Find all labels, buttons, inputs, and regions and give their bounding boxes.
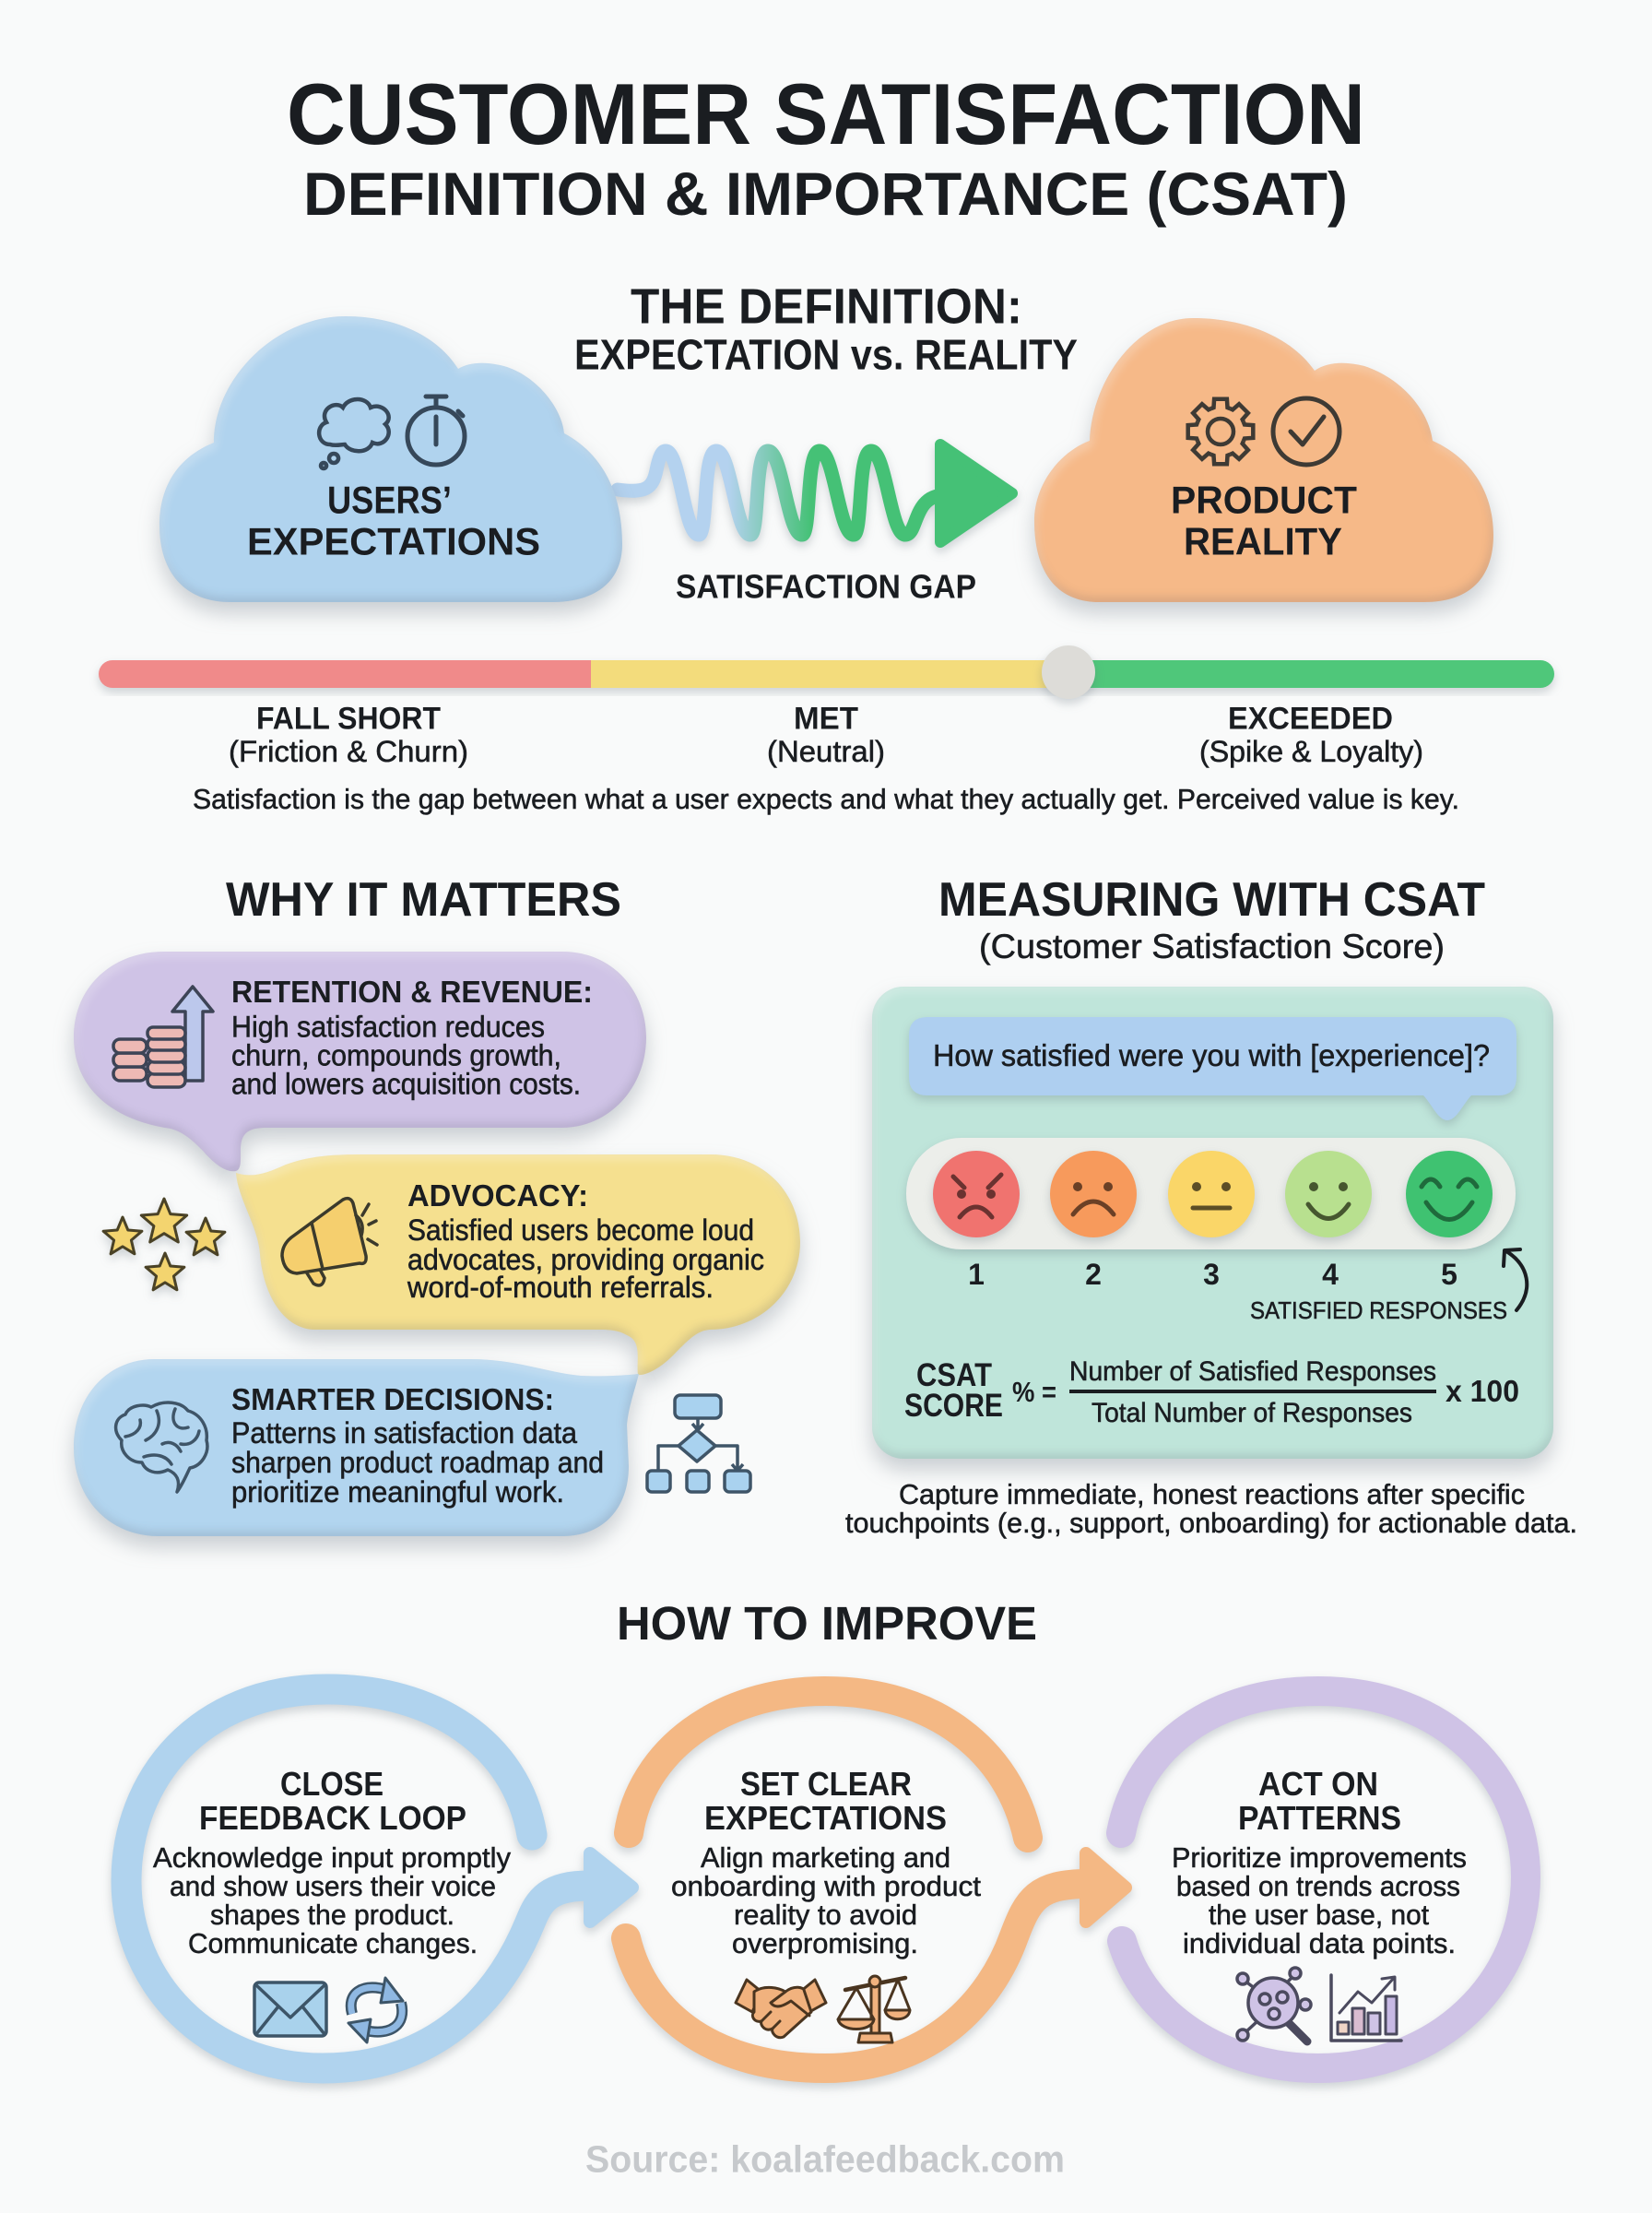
cloud: product reality xyxy=(1034,318,1493,602)
scale label: exceeded xyxy=(1199,701,1423,768)
face: unhappy xyxy=(1050,1151,1137,1237)
panel: csat survey xyxy=(872,987,1553,1459)
loop: close feedback loop: Communicate changes. xyxy=(188,1927,478,1959)
ring xyxy=(1121,1691,1526,2068)
slider scale xyxy=(99,645,1554,699)
scale label: exceeded: (Spike & Loyalty) xyxy=(1199,735,1423,768)
question bubble: How satisfied were you with [experience]? xyxy=(933,1038,1490,1072)
scale label: fall short: FALL SHORT xyxy=(256,701,441,736)
scale label: met xyxy=(767,701,885,768)
loop: close feedback loop: Acknowledge input promptly xyxy=(153,1841,511,1874)
title: DEFINITION & IMPORTANCE (CSAT) xyxy=(303,160,1348,228)
title xyxy=(287,65,1365,228)
question bubble xyxy=(909,1017,1516,1120)
definition description: Satisfaction is the gap between what a user expects and what they actually get. Perceived value is key. xyxy=(193,783,1459,815)
loop: set clear expectations: overpromising. xyxy=(732,1927,918,1959)
scale label: met: (Neutral) xyxy=(767,735,885,768)
bubble: smarter decisions: Patterns in satisfaction data xyxy=(231,1416,577,1450)
bubble: advocacy xyxy=(236,1154,800,1375)
loop: set clear expectations: onboarding with product xyxy=(671,1870,981,1902)
loop: act on patterns: PATTERNS xyxy=(1238,1799,1401,1837)
bubble: retention and revenue: churn, compounds growth, xyxy=(231,1038,561,1071)
icon: balance scale xyxy=(838,1976,910,2042)
loop: close feedback loop xyxy=(126,1689,632,2068)
heading: measuring with csat xyxy=(938,873,1485,965)
face: happy xyxy=(1285,1151,1372,1237)
face: very happy xyxy=(1406,1151,1493,1237)
loop: act on patterns: individual data points. xyxy=(1183,1927,1456,1959)
heading: why it matters: WHY IT MATTERS xyxy=(226,873,621,927)
rating numbers: 1 xyxy=(968,1258,985,1291)
scale label: fall short: (Friction & Churn) xyxy=(229,735,468,768)
cloud label: expectations: EXPECTATIONS xyxy=(247,520,540,562)
icon: thought cloud xyxy=(319,399,389,468)
rating pill xyxy=(906,1138,1516,1249)
loop: act on patterns: the user base, not xyxy=(1209,1899,1429,1931)
loop: set clear expectations: Align marketing and xyxy=(701,1841,950,1874)
label: satisfaction gap: SATISFACTION GAP xyxy=(676,568,976,605)
loop: act on patterns: based on trends across xyxy=(1176,1870,1460,1902)
loop: act on patterns: Prioritize improvements xyxy=(1172,1841,1467,1874)
heading: the definition xyxy=(574,278,1078,378)
csat caption: Capture immediate, honest reactions after specific xyxy=(899,1478,1525,1510)
icon: check circle xyxy=(1273,398,1339,465)
loop: close feedback loop: FEEDBACK LOOP xyxy=(199,1799,466,1837)
step text: CLOSE xyxy=(280,1765,384,1803)
step text: SET CLEAR xyxy=(740,1765,912,1803)
loop: set clear expectations: EXPECTATIONS xyxy=(704,1799,947,1837)
cloud label: USERS’ xyxy=(327,478,452,522)
csat caption xyxy=(845,1478,1577,1539)
bubble text: RETENTION & REVENUE: xyxy=(231,975,593,1009)
spring arrow: satisfaction gap xyxy=(618,444,1012,542)
icon: magnifier with data nodes xyxy=(1237,1968,1311,2041)
icon: growth chart xyxy=(1331,1975,1401,2041)
icon: megaphone xyxy=(282,1199,377,1285)
bubble: retention and revenue: and lowers acquisition costs. xyxy=(231,1068,581,1101)
heading: measuring with csat: (Customer Satisfaction Score) xyxy=(979,928,1445,965)
csat formula: CSAT xyxy=(916,1357,992,1393)
icon: coins and growth arrow xyxy=(113,987,213,1087)
icon: sync arrows xyxy=(348,1978,403,2042)
ring and arrow xyxy=(626,1691,1126,2068)
icon: envelope xyxy=(254,1982,326,2036)
face: neutral xyxy=(1168,1151,1255,1237)
bubble: retention and revenue xyxy=(74,952,646,1171)
icon: gear xyxy=(1188,399,1253,464)
csat formula xyxy=(904,1356,1519,1428)
csat formula: Total Number of Responses xyxy=(1092,1398,1412,1428)
rating numbers: 5 xyxy=(1441,1258,1457,1291)
rating numbers: 2 xyxy=(1085,1258,1102,1291)
loop: close feedback loop: and show users their voice xyxy=(170,1870,496,1902)
loop: act on patterns xyxy=(1121,1691,1526,2068)
bubble: advocacy: word-of-mouth referrals. xyxy=(407,1271,714,1304)
heading: the definition: THE DEFINITION: xyxy=(631,278,1022,334)
cloud: users' expectations xyxy=(159,316,622,602)
scale label: exceeded: EXCEEDED xyxy=(1228,701,1393,736)
face: very unhappy xyxy=(933,1151,1020,1237)
csat caption: touchpoints (e.g., support, onboarding) for actionable data. xyxy=(845,1507,1577,1539)
scale label: fall short xyxy=(229,701,468,768)
csat formula: x 100 xyxy=(1446,1374,1519,1408)
ring and arrow xyxy=(126,1689,632,2068)
csat formula: SCORE xyxy=(904,1388,1003,1424)
satisfied responses label: SATISFIED RESPONSES xyxy=(1250,1296,1507,1324)
icon: brain xyxy=(116,1402,207,1492)
icon: stopwatch xyxy=(407,396,465,465)
bubble: advocacy: Satisfied users become loud xyxy=(407,1213,754,1247)
icon: flowchart xyxy=(647,1395,750,1492)
bubble: smarter decisions xyxy=(74,1359,639,1536)
loop: set clear expectations xyxy=(626,1691,1126,2068)
bubble: smarter decisions: sharpen product roadmap and xyxy=(231,1446,604,1479)
rating numbers: 4 xyxy=(1322,1258,1339,1291)
bubble: retention and revenue: High satisfaction reduces xyxy=(231,1011,545,1044)
icon: handshake xyxy=(736,1980,826,2038)
heading: how to improve: HOW TO IMPROVE xyxy=(617,1597,1037,1650)
csat formula: % = xyxy=(1012,1376,1056,1408)
scale label: met: MET xyxy=(794,701,858,736)
csat formula: Number of Satisfied Responses xyxy=(1069,1356,1436,1387)
rating numbers: 3 xyxy=(1203,1258,1220,1291)
heading: measuring with csat: MEASURING WITH CSAT xyxy=(938,873,1485,927)
cloud label: PRODUCT xyxy=(1171,478,1357,522)
loop: set clear expectations: reality to avoid xyxy=(734,1899,917,1931)
loop: close feedback loop: shapes the product. xyxy=(210,1899,454,1931)
icon: stars xyxy=(103,1199,225,1290)
cloud label: reality: REALITY xyxy=(1184,520,1342,562)
rating numbers xyxy=(968,1258,1457,1291)
step text: ACT ON xyxy=(1258,1765,1378,1803)
bubble text: ADVOCACY: xyxy=(407,1178,588,1213)
bubble: advocacy: advocates, providing organic xyxy=(407,1243,764,1276)
bubble text: SMARTER DECISIONS: xyxy=(231,1382,554,1416)
title: CUSTOMER SATISFACTION xyxy=(287,65,1365,162)
bubble: smarter decisions: prioritize meaningful work. xyxy=(231,1475,564,1509)
curved arrow xyxy=(1504,1249,1527,1310)
heading: the definition: EXPECTATION vs. REALITY xyxy=(574,330,1078,378)
source footer: Source: koalafeedback.com xyxy=(585,2137,1065,2180)
slider knob xyxy=(1042,645,1095,699)
